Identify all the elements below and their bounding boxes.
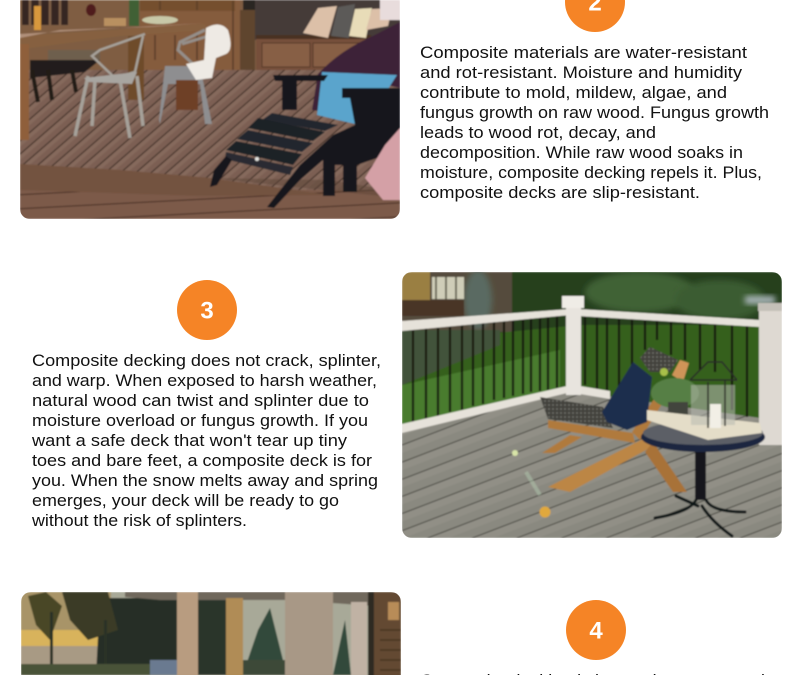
green lawn [402,324,760,419]
wood wall with lantern [368,592,401,675]
dark trees [21,592,351,675]
adirondack chair [210,75,400,208]
navy cushion [602,362,652,430]
text block: no cracks or splinters: moisture overload or fungus growth. If you [32,411,368,430]
photo: covered porch with log columns and sunset view [21,592,401,675]
serving tray [647,410,762,440]
text block: no cracks or splinters: want a safe deck that won't tear up tiny [31,431,348,450]
photo: grey deck with white railing, lounge chair and side table [402,270,782,538]
number badge 3 [177,280,237,340]
number badge 4: 4 [589,618,603,644]
metal chair with sheepskin throw [159,24,231,124]
metal chair [75,34,145,138]
view background: sky and sunset [21,592,401,675]
text block: no cracks or splinters: you. When the snow melts away and spring [32,471,378,490]
floral throw [365,128,400,200]
deck boards [402,390,782,538]
number badge 3: 3 [200,298,214,324]
text block: moisture and rot resistance [420,43,769,202]
decking floor [20,70,400,219]
text block: moisture and rot resistance: moisture, composite decking repels it. Plus, [420,163,762,182]
text block: no cracks or splinters: Composite decking does not crack, splinter, [32,351,381,370]
text block: no cracks or splinters: and warp. When exposed to harsh weather, [32,371,377,390]
glass lantern with candle [690,362,737,428]
text block: moisture and rot resistance: fungus growth on raw wood. Fungus growth [420,103,769,122]
text block: moisture and rot resistance: leads to wood rot, decay, and [420,123,656,142]
text block: no cracks or splinters: emerges, your deck will be ready to go [32,491,339,510]
side table top [641,421,765,452]
bench pillows [303,0,400,38]
text block: no cracks or splinters: toes and bare feet, a composite deck is for [32,451,372,470]
potted plant [651,368,699,418]
log columns [177,592,367,675]
text block: no cracks or splinters: natural wood can twist and splinter due to [32,391,369,410]
storage bench [256,35,371,70]
woven seat and back [540,347,678,428]
dining table [20,0,207,140]
blue floral pillow [317,72,397,128]
lounge chair frame [542,360,689,492]
photo: deck with dining table and black adirondack chair [20,0,400,219]
side table base [655,448,745,536]
trees and house background [402,272,782,334]
text block: moisture and rot resistance: Composite materials are water-resistant [420,43,747,62]
text block: no cracks or splinters [31,351,381,530]
text block: moisture and rot resistance: decomposition. While raw wood soaks in [420,143,743,162]
white railing and posts [402,296,782,445]
text block: moisture and rot resistance: contribute to mold, mildew, algae, and [420,83,727,102]
text block: moisture and rot resistance: composite decks are slip-resistant. [420,183,700,202]
back wall and cabinets [20,0,400,72]
railing balusters [413,313,747,424]
number badge 4 [566,600,626,660]
text block: moisture and rot resistance: and rot-resistant. Moisture and humidity [420,63,743,82]
lens flare [512,450,550,518]
porch ceiling [124,592,370,606]
number badge 2 [565,0,625,32]
text block: no cracks or splinters: without the risk of splinters. [31,511,247,530]
purple knit blanket [312,22,400,112]
